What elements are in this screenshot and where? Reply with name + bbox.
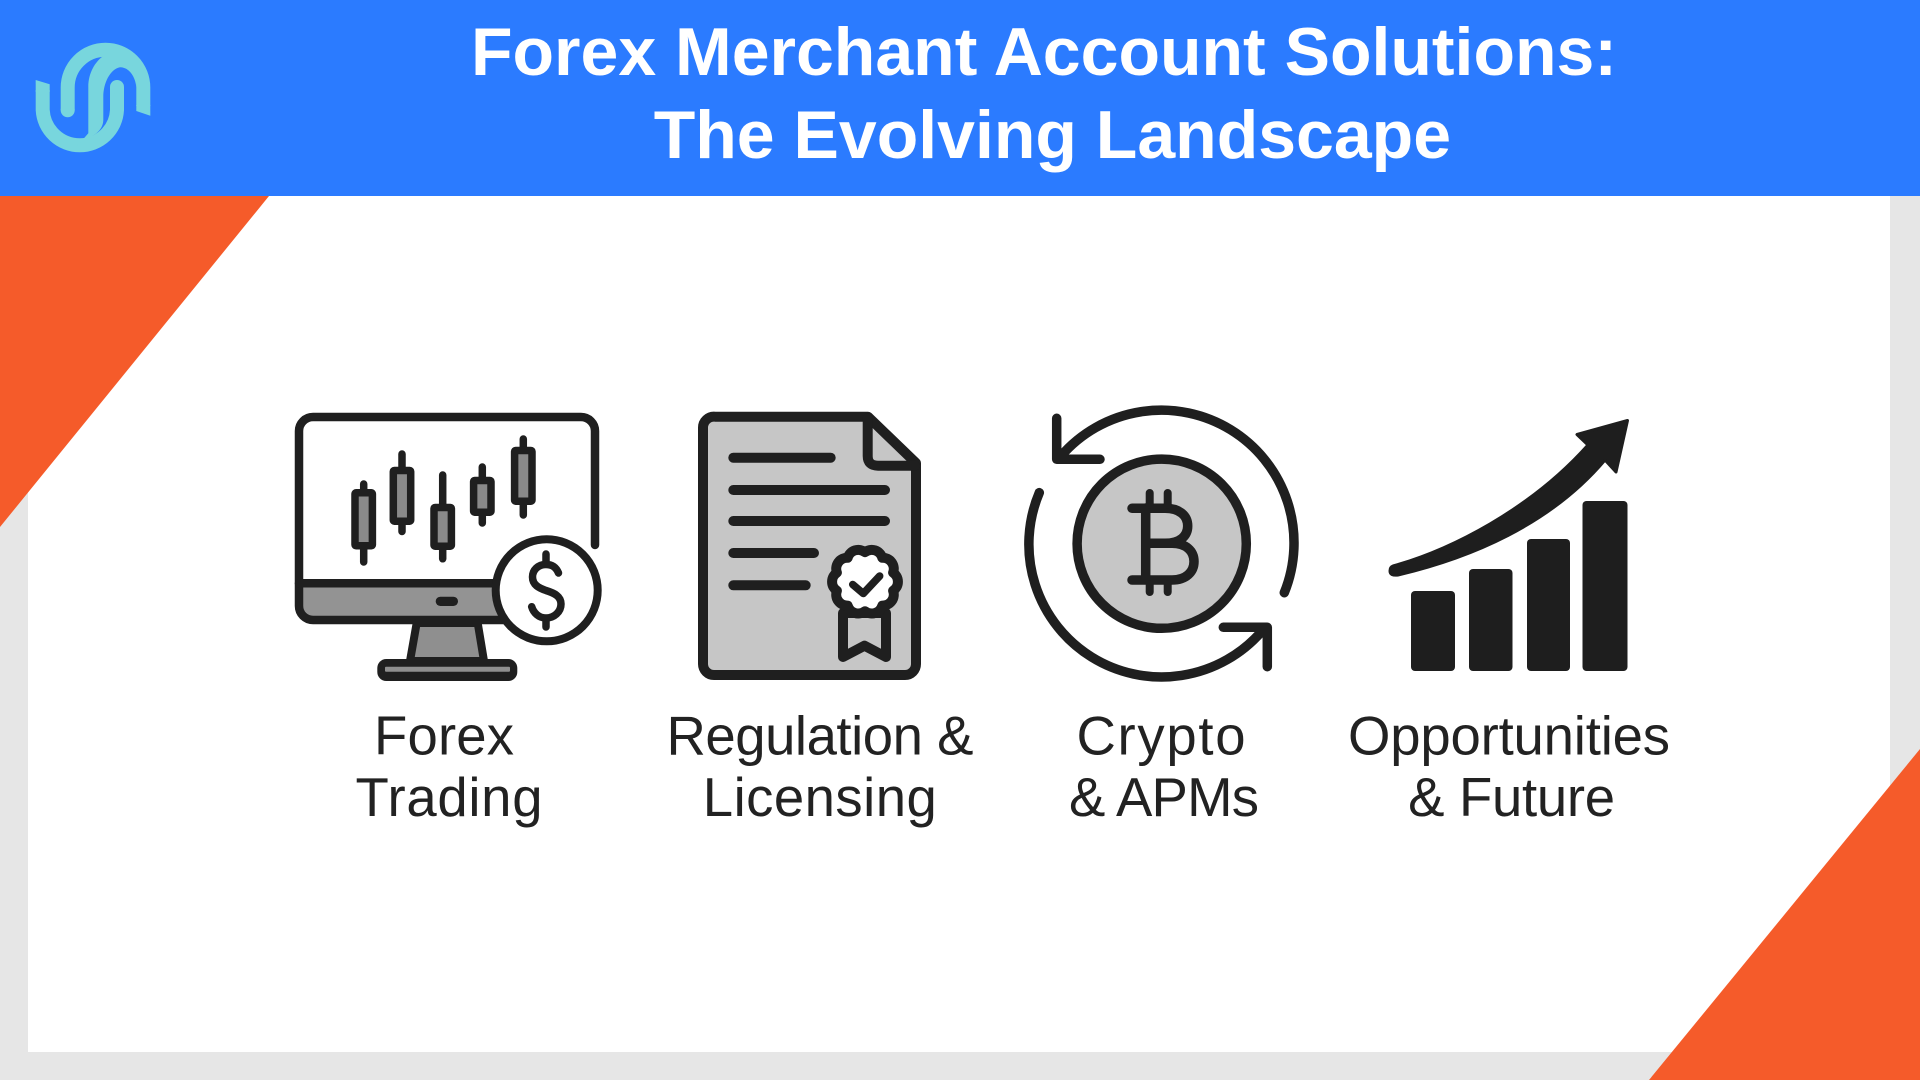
growth arrow	[1390, 420, 1628, 575]
label: regulation and licensing: Licensing	[703, 767, 937, 828]
label: opportunities and future	[1348, 706, 1670, 828]
label: crypto and APMs: Crypto	[1076, 706, 1246, 766]
orange corner triangle: bottom right	[1649, 749, 1920, 1080]
certificate seal	[832, 550, 898, 657]
icon: forex trading monitor	[299, 417, 598, 681]
title	[471, 14, 1617, 173]
label: opportunities and future: & Future	[1408, 767, 1615, 828]
icon: crypto bitcoin cycle	[1029, 410, 1294, 677]
text lines	[733, 458, 885, 585]
header band	[0, 0, 1920, 196]
cycle arrows	[1029, 410, 1294, 677]
label: opportunities and future: Opportunities	[1348, 706, 1670, 766]
title: The Evolving Landscape	[654, 97, 1451, 173]
icon: regulation document	[703, 417, 916, 675]
label: regulation and licensing: Regulation &	[666, 706, 974, 766]
label: forex trading	[356, 706, 542, 828]
title: Forex Merchant Account Solutions:	[471, 14, 1617, 90]
label: forex trading: Forex	[374, 706, 514, 766]
logo	[36, 50, 150, 147]
orange corner triangle: top left	[0, 196, 269, 527]
icon: growth bar chart	[1390, 420, 1628, 671]
label: forex trading: Trading	[356, 767, 542, 828]
bitcoin symbol	[1132, 508, 1194, 580]
label: regulation and licensing	[666, 706, 974, 828]
candlesticks	[355, 439, 532, 562]
dollar coin	[496, 539, 598, 641]
label: crypto and APMs: & APMs	[1069, 767, 1259, 828]
white content panel	[28, 196, 1890, 1052]
label: crypto and APMs	[1069, 706, 1259, 828]
